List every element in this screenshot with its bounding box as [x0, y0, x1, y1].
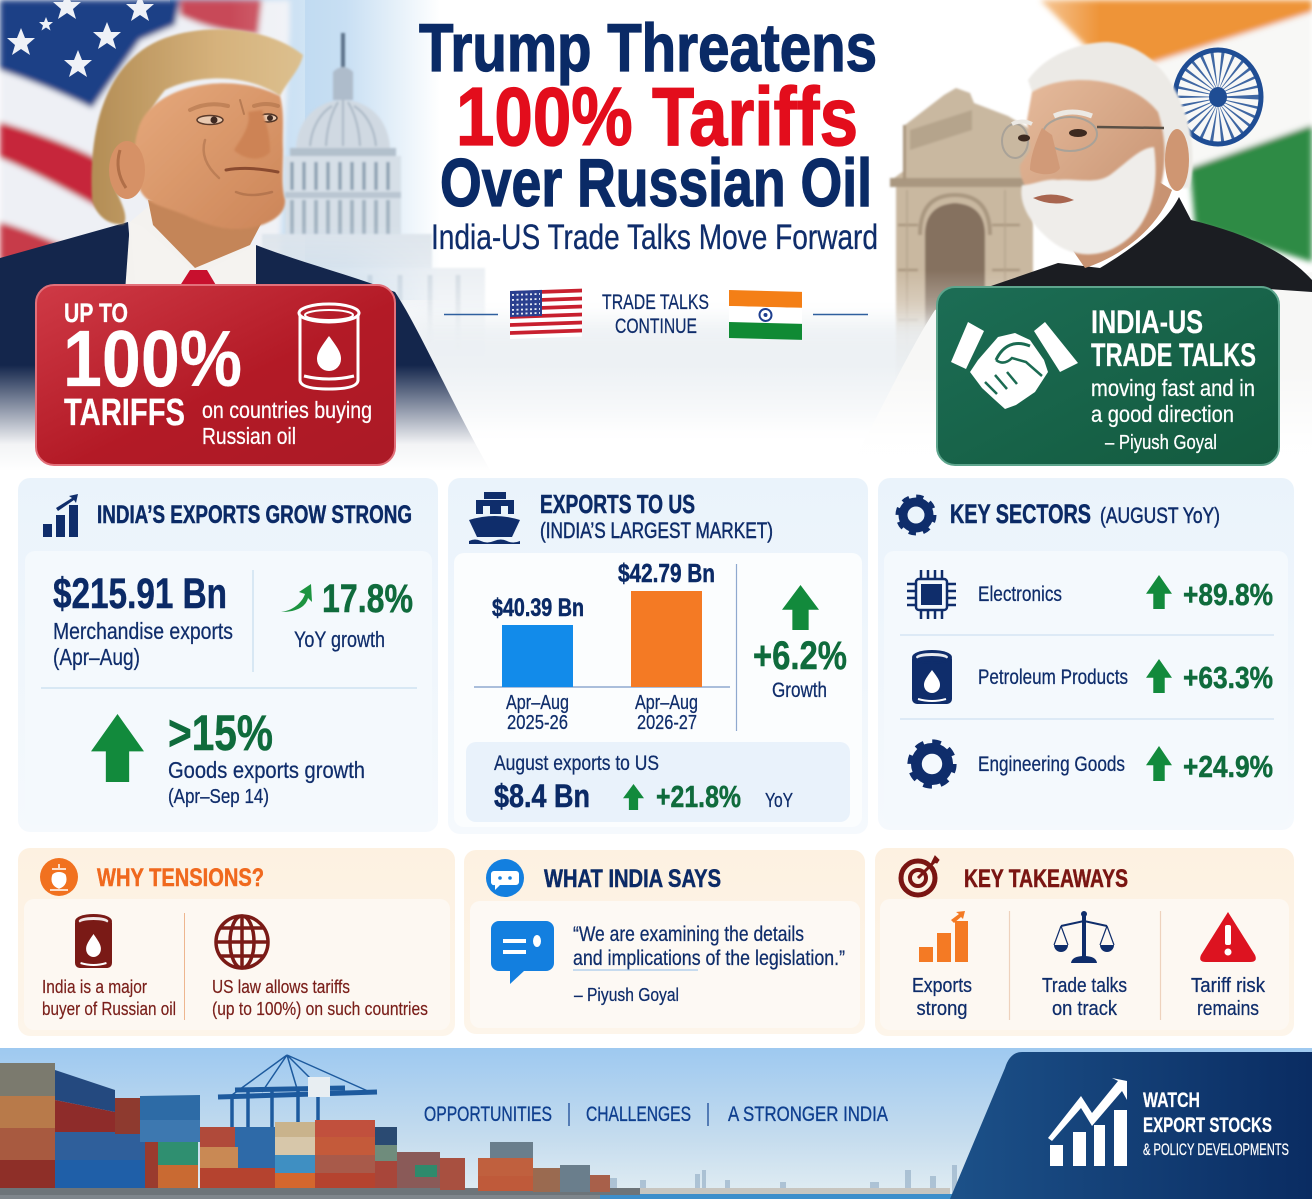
bar: 2025-26: Apr–Aug: [506, 692, 569, 714]
icon: handshake: [951, 322, 1078, 409]
Modi figure: [850, 42, 1312, 470]
title line 3: Over Russian Oil: [440, 145, 872, 221]
heading: KEY SECTORS: [950, 499, 1091, 529]
US flag backdrop: [0, 0, 290, 262]
stat: merchandise exports: (Apr–Aug): [53, 644, 140, 670]
text: US law: [212, 976, 428, 1019]
takeaway: exports: strong: [916, 998, 968, 1020]
stat: goods exports growth: (Apr–Sep 14): [168, 786, 269, 808]
callout: India-US trade talks: TRADE TALKS: [1091, 337, 1256, 373]
bar: 2026-27: Apr–Aug: [635, 692, 698, 714]
Trump figure: [0, 29, 490, 470]
callout: India-US trade talks: INDIA-US: [1091, 304, 1203, 340]
white kurta: [850, 272, 1312, 470]
icon: gear: [899, 498, 933, 532]
panel: watch export stocks: [950, 1052, 1312, 1199]
heading: KEY TAKEAWAYS: [964, 865, 1128, 893]
icon: chat badge: [486, 859, 524, 897]
heading: (INDIA’S LARGEST MARKET): [540, 518, 773, 543]
icon: chip: [907, 570, 956, 619]
stat: merchandise exports: [53, 570, 233, 670]
white beard: [1021, 147, 1156, 254]
row: petroleum products: +63.3%: [1183, 660, 1273, 695]
stat: goods exports growth: Goods exports growth: [168, 757, 365, 783]
icon: India flag: [729, 290, 802, 340]
row: electronics: +89.8%: [1183, 577, 1273, 612]
callout: India-US trade talks: a good direction: [1091, 401, 1234, 427]
heading: (AUGUST YoY): [1100, 503, 1220, 528]
heading: WHAT INDIA SAYS: [544, 865, 721, 893]
icon: curved green arrow: [281, 584, 312, 612]
stat: growth: +6.2%: [753, 634, 847, 678]
hero bottom fade: [0, 365, 1312, 471]
nose: [1030, 128, 1060, 174]
icon: cargo ship: [469, 492, 520, 544]
icon: US flag: [510, 288, 582, 339]
takeaway: trade talks: Trade talks: [1042, 975, 1127, 997]
black jacket: [991, 197, 1312, 292]
trade talks label: CONTINUE: [615, 315, 697, 338]
August exports box: $8.4 Bn: [494, 778, 590, 814]
row: engineering goods: +24.9%: [1183, 749, 1273, 784]
bar: 2026-27: $42.79 Bn: [618, 558, 715, 588]
icon: barrel: [75, 914, 112, 968]
India Gate monument: [888, 87, 1034, 342]
takeaway: exports: Exports: [912, 975, 972, 997]
stat: YoY growth: YoY growth: [294, 627, 385, 652]
flag fade: [230, 0, 305, 280]
stat: growth: [753, 585, 847, 702]
bar: 2025-26: [492, 594, 584, 734]
heading: WHY TENSIONS?: [97, 864, 264, 892]
callout: India-US trade talks: [937, 287, 1279, 465]
stat: YoY growth: 17.8%: [322, 577, 413, 621]
icon: big up arrow: [91, 714, 144, 782]
panel: India's exports grow strong: [18, 478, 438, 832]
panel: key takeaways: [875, 848, 1294, 1036]
August exports box: YoY: [765, 790, 793, 812]
hero photo background: [0, 0, 1312, 410]
takeaway: tariff risk: Tariff risk: [1191, 975, 1266, 997]
row: electronics: Electronics: [978, 583, 1062, 606]
takeaway: trade talks: [1042, 911, 1127, 1020]
stat: YoY growth: [281, 577, 413, 652]
quote: “We are examining the details: [573, 923, 804, 946]
text: major buyer: [42, 976, 176, 1019]
row: petroleum products: [912, 650, 1273, 704]
text: US law: (up to 100%) on such countries: [212, 998, 428, 1019]
text: major buyer: India is a major: [42, 976, 147, 997]
stat: growth: Growth: [772, 679, 827, 702]
flag fade left: [1000, 0, 1100, 70]
panel: key sectors: [878, 478, 1294, 830]
row: engineering goods: [912, 744, 1273, 784]
icon: rising chart: [1048, 1078, 1127, 1166]
bar: 2026-27: [618, 558, 715, 734]
water: [590, 1194, 960, 1199]
takeaway: trade talks: on track: [1052, 998, 1118, 1020]
neck: [1060, 170, 1172, 268]
August exports box: August exports to US: [494, 752, 659, 775]
callout: India-US trade talks: – Piyush Goyal: [1105, 432, 1217, 454]
face: [1020, 80, 1165, 235]
callout: 100% tariffs: 100%: [63, 314, 242, 403]
container stacks: [0, 1063, 610, 1192]
face: [134, 83, 285, 229]
icon: globe: [216, 916, 268, 968]
panel: exports to US: [448, 478, 868, 834]
bar: 2026-27: 2026-27: [637, 712, 697, 734]
banner text: A STRONGER INDIA: [728, 1103, 888, 1126]
quote: and implications of the legislation.”: [573, 947, 845, 970]
row: petroleum products: Petroleum Products: [978, 666, 1128, 689]
title line 2: 100% Tariffs: [456, 70, 858, 163]
suit: [0, 222, 490, 470]
stat: merchandise exports: $215.91 Bn: [53, 570, 227, 618]
icon: orange badge: [40, 858, 78, 896]
callout: India-US trade talks: moving fast and in: [1091, 375, 1255, 401]
takeaway: tariff risk: remains: [1197, 998, 1259, 1020]
Ashoka chakra: [1175, 50, 1261, 144]
flag stars: [7, 0, 154, 77]
stat: goods exports growth: >15%: [168, 705, 273, 761]
title block: [419, 10, 878, 257]
stat: merchandise exports: Merchandise exports: [53, 618, 233, 644]
callout: 100% tariffs: Russian oil: [202, 423, 296, 449]
ear: [1165, 129, 1189, 191]
callout: 100% tariffs: [36, 285, 395, 465]
August exports box: [466, 742, 850, 822]
callout: 100% tariffs: UP TO: [64, 298, 128, 328]
crane: [218, 1055, 377, 1140]
dock: [0, 1188, 640, 1195]
bar: 2025-26: 2025-26: [507, 712, 568, 734]
shirt collar: [125, 205, 256, 292]
ear: [109, 141, 145, 199]
callout: 100% tariffs: on countries buying: [202, 397, 372, 423]
trade talks label: TRADE TALKS: [602, 291, 709, 314]
neck: [148, 200, 262, 268]
banner text: CHALLENGES: [586, 1103, 691, 1126]
bottom banner: port scene: [0, 1048, 1312, 1199]
icon: bars with arrow: [43, 494, 78, 537]
callout: 100% tariffs: TARIFFS: [64, 392, 185, 434]
nose: [234, 110, 270, 159]
callout text: WATCH: [1143, 1089, 1200, 1112]
US Capitol building: [262, 33, 485, 358]
haze: [410, 320, 950, 430]
stat: goods exports growth: [168, 705, 365, 808]
banner text: OPPORTUNITIES: [424, 1103, 552, 1126]
India flag backdrop: [1040, 0, 1312, 262]
bar: 2025-26: $40.39 Bn: [492, 594, 584, 622]
title line 1: Trump Threatens: [419, 10, 877, 86]
trade talks label: [602, 291, 709, 338]
bar chart: [474, 558, 730, 734]
tie: [176, 270, 220, 292]
heading: EXPORTS TO US: [540, 489, 695, 519]
August exports box: +21.8%: [656, 779, 741, 814]
row: engineering goods: Engineering Goods: [978, 753, 1125, 776]
subtitle: India-US Trade Talks Move Forward: [431, 218, 878, 257]
quote: – Piyush Goyal: [574, 985, 679, 1005]
callout text: [1143, 1089, 1289, 1159]
trade talks continue strip: [444, 288, 868, 340]
panel: what India says: [464, 850, 865, 1034]
banner text: [424, 1103, 888, 1126]
hair: [91, 29, 303, 224]
heading: INDIA’S EXPORTS GROW STRONG: [97, 501, 412, 529]
mouth: [1033, 194, 1074, 204]
text: major buyer: buyer of Russian oil: [42, 998, 176, 1019]
text: US law: US law allows tariffs: [212, 976, 350, 997]
panel: why tensions: [18, 848, 455, 1036]
hair: [1028, 42, 1193, 188]
glasses and brows: [1002, 112, 1164, 158]
skyline: [610, 1165, 957, 1194]
icon: oil barrel: [299, 304, 359, 389]
heading: [540, 489, 773, 543]
icon: target: [901, 856, 939, 895]
facial features: [190, 100, 278, 195]
quote: [573, 923, 845, 1005]
icon: speech bubble: [491, 921, 554, 984]
takeaway: exports: [912, 911, 972, 1020]
takeaway: tariff risk: [1191, 912, 1266, 1020]
row: electronics: [907, 570, 1273, 619]
